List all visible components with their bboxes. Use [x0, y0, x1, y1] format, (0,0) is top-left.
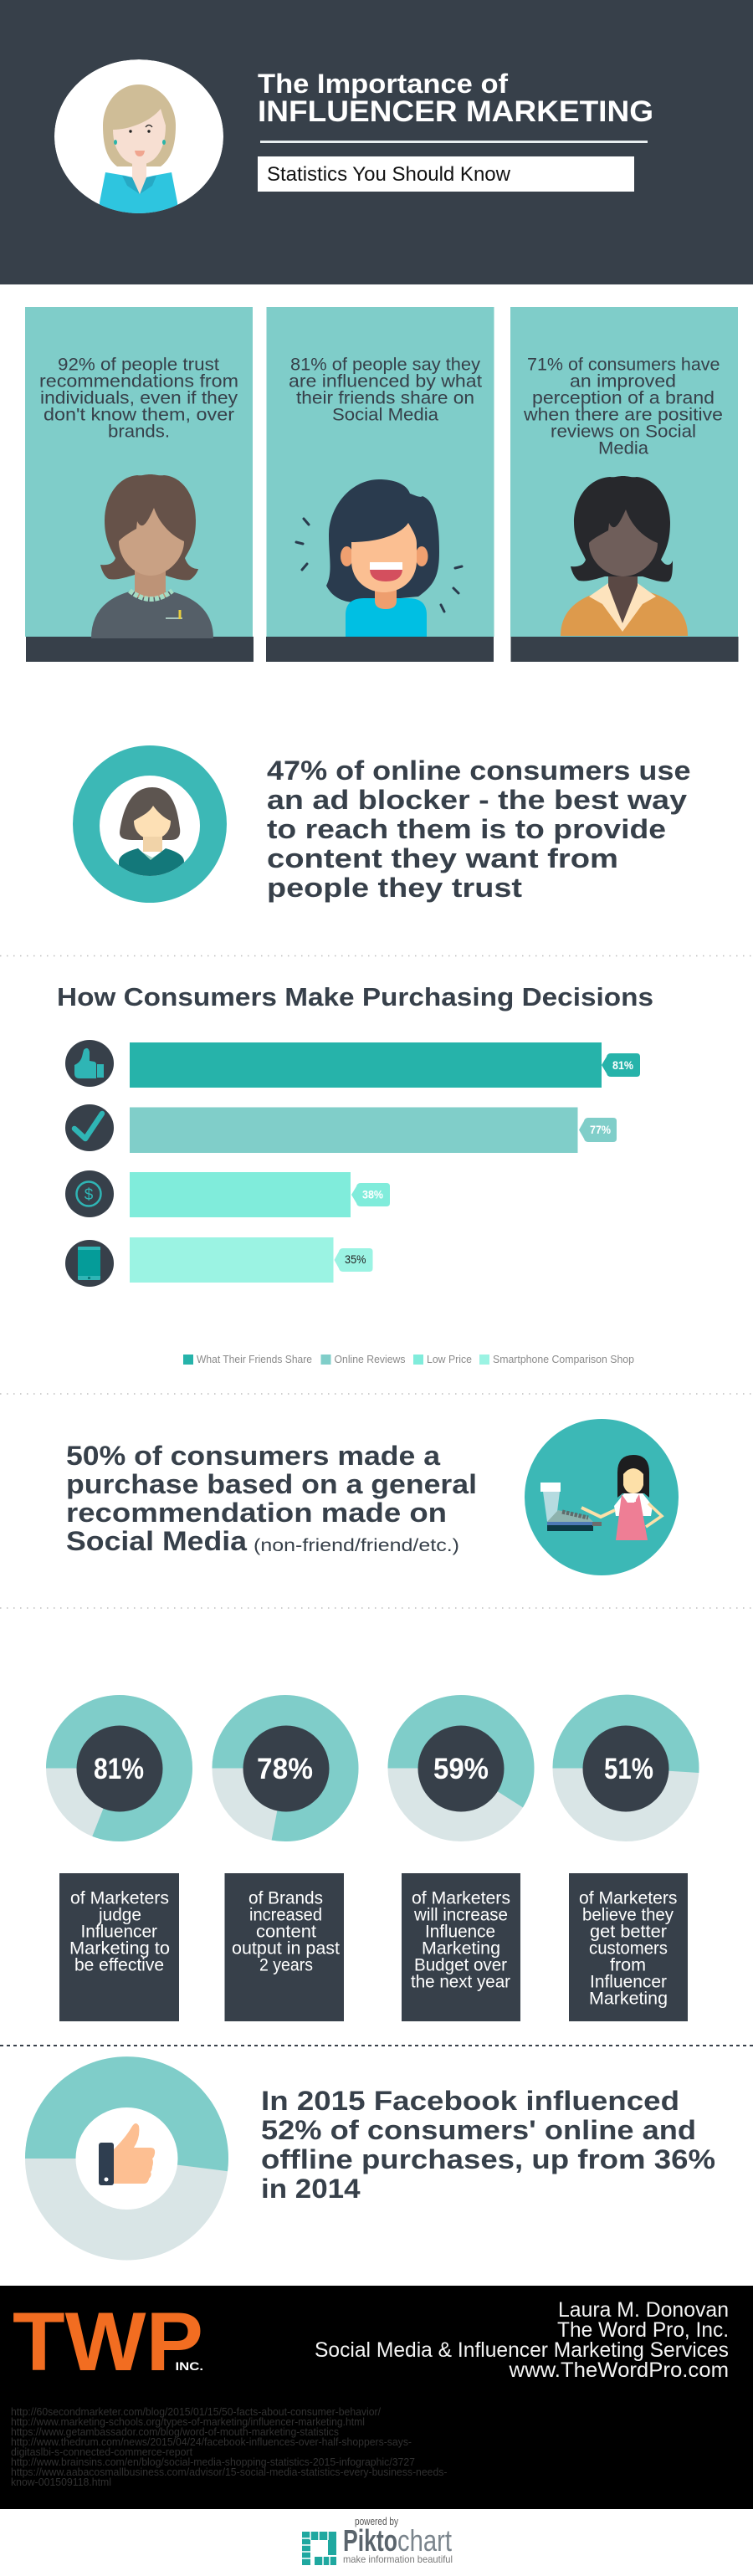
text box: marketers judge effective: of Marketers: [70, 1889, 169, 1908]
card text: [39, 355, 238, 442]
chart legend: Online Reviews: [335, 1354, 405, 1365]
title: INFLUENCER MARKETING: [258, 95, 653, 128]
card text: reviews on Social: [551, 422, 696, 442]
card text: 81% of people say they: [290, 355, 481, 375]
stat text: content they want from: [267, 843, 618, 873]
powered by Piktochart logo: chart: [397, 2523, 452, 2558]
card text: recommendations from: [39, 371, 238, 392]
chart legend: [183, 1354, 634, 1365]
panel: 92% trust recommendations: [25, 307, 254, 662]
sources list: digitaslbi-s-connected-commerce-report: [11, 2446, 193, 2458]
text box: brands increased content: output in past: [232, 1939, 340, 1958]
card text: their friends share on: [296, 388, 474, 408]
card text: Media: [598, 438, 648, 458]
card text: perception of a brand: [532, 388, 715, 408]
stat text: (non-friend/friend/etc.): [254, 1536, 459, 1555]
text box: brands increased content: 2 years: [259, 1956, 313, 1974]
donut: 59%: 59%: [433, 1753, 489, 1785]
bar: what their friends share 81%: [130, 1042, 640, 1088]
card text: brands.: [108, 422, 170, 442]
bar: what their friends share 81%: 81%: [612, 1058, 633, 1072]
card text: 92% of people trust: [58, 355, 219, 375]
chart legend: What Their Friends Share: [197, 1354, 312, 1365]
stat text: Social Media: [66, 1526, 247, 1556]
chart legend: Smartphone Comparison Shop: [493, 1354, 634, 1365]
powered by Piktochart logo: powered by: [355, 2515, 398, 2527]
contact details: The Word Pro, Inc.: [557, 2318, 729, 2342]
icon: blonde woman avatar: [54, 59, 223, 218]
text box: brands increased content: content: [256, 1923, 316, 1941]
bar: online reviews 77%: 77%: [590, 1123, 611, 1136]
stat text: to reach them is to provide: [267, 814, 666, 844]
donut: 51%: 51%: [604, 1753, 653, 1785]
text box: marketers increase budget: the next year: [411, 1973, 510, 1991]
card text: are influenced by what: [289, 371, 482, 392]
text box: marketers better customers: Marketing: [589, 1990, 668, 2008]
stat text: offline purchases, up from 36%: [261, 2144, 715, 2174]
stat text: in 2014: [261, 2174, 361, 2204]
powered by Piktochart logo: [302, 2515, 453, 2565]
icon: check mark: [65, 1104, 114, 1151]
card text: Social Media: [332, 405, 438, 425]
ad blocker stat section: [73, 745, 691, 903]
donut: 78%: 78%: [257, 1753, 313, 1785]
chart heading: How Consumers Make Purchasing Decisions: [57, 982, 653, 1011]
title: The Importance of: [258, 69, 508, 99]
sources list: https://www.getambassador.com/blog/word-of-mouth-marketing-statistics: [11, 2426, 339, 2438]
icon: cashier at register: [525, 1419, 679, 1575]
sources list: http://www.brainsins.com/en/blog/social-media-shopping-statistics-2015-infographic/3727: [11, 2456, 415, 2468]
stat text: [267, 755, 691, 903]
donut: 59%: [388, 1695, 534, 1841]
icon: smartphone: [65, 1240, 114, 1287]
icon: smiling woman: [296, 479, 462, 637]
sources list: http://www.marketing-schools.org/types-of-marketing/influencer-marketing.html: [11, 2416, 365, 2428]
bar: low price 38%: [130, 1172, 390, 1217]
text box: brands increased content: [224, 1873, 344, 2021]
stat text: 50% of consumers made a: [66, 1441, 440, 1471]
chart legend: Low Price: [427, 1354, 472, 1365]
stat text: 47% of online consumers use: [267, 755, 691, 786]
contact details: [315, 2298, 729, 2382]
TWP logo: INC.: [176, 2359, 203, 2373]
social media purchase stat section: [66, 1419, 679, 1575]
icon: woman with black hair: [561, 476, 688, 636]
stat text: recommendation made on: [66, 1498, 447, 1528]
sources list: know-001509118.html: [11, 2476, 111, 2488]
stat text: 52% of consumers' online and: [261, 2115, 696, 2145]
text box: marketers increase budget: Budget over: [414, 1956, 507, 1974]
sources list: http://60secondmarketer.com/blog/2015/01/15/50-facts-about-consumer-behavior/: [11, 2406, 382, 2418]
icon: woman in teal ring: [73, 745, 227, 903]
donut: 51%: [552, 1695, 699, 1841]
sources list: http://www.thedrum.com/news/2015/04/24/facebook-influences-over-half-shoppers-says-: [11, 2436, 412, 2448]
ticks around the head: [296, 519, 462, 612]
text box: marketers increase budget: [402, 1873, 520, 2021]
text box: marketers better customers: of Marketers: [579, 1889, 678, 1908]
donut: 81%: [46, 1695, 192, 1841]
sources list: https://www.aabacosmallbusiness.com/advisor/15-social-media-statistics-every-business-needs-: [11, 2466, 447, 2478]
footer panel: [0, 2286, 753, 2509]
subtitle box: Statistics You Should Know: [267, 163, 511, 186]
facebook stat section: [25, 2056, 715, 2261]
icon: dollar coin: $: [85, 1186, 94, 1204]
section: how consumers make purchasing decisions: [57, 982, 653, 1365]
card text: an improved: [570, 371, 676, 392]
stat text: [66, 1441, 477, 1556]
powered by Piktochart logo: make information beautiful: [343, 2553, 453, 2565]
stat text: people they trust: [267, 873, 522, 903]
text box: marketers better customers: [569, 1873, 688, 2021]
stat text: [261, 2086, 715, 2204]
donut: 52% with thumbs up: [25, 2056, 228, 2261]
bar: smartphone comparison shop 35%: [130, 1237, 373, 1283]
bar: smartphone comparison shop 35%: 35%: [345, 1252, 366, 1266]
text box: marketers increase budget: Marketing: [422, 1939, 500, 1958]
bar: low price 38%: 38%: [362, 1188, 383, 1201]
donut: 81%: 81%: [94, 1753, 144, 1785]
text box: marketers better customers: believe they: [582, 1906, 674, 1924]
panel: 71% improved perception: [510, 307, 738, 662]
stat text: purchase based on a general: [66, 1469, 477, 1499]
card text: individuals, even if they: [40, 388, 238, 408]
card text: [523, 355, 723, 458]
icon: woman with brown hair: [91, 474, 213, 638]
text box: brands increased content: increased: [249, 1906, 322, 1924]
icon: thumbs up: [65, 1040, 114, 1087]
text box: marketers better customers: customers: [589, 1939, 668, 1958]
panel: 81% influenced by friends: [266, 307, 494, 662]
stat text: an ad blocker - the best way: [267, 785, 687, 815]
subtitle box: [258, 156, 634, 192]
text box: marketers judge effective: Influencer: [80, 1923, 157, 1941]
text box: marketers increase budget: Influence: [425, 1923, 495, 1941]
text box: marketers judge effective: Marketing to: [69, 1939, 170, 1958]
text box: marketers increase budget: will increase: [413, 1906, 508, 1924]
icon: dollar coin: [65, 1170, 114, 1217]
icon: Piktochart mark: [302, 2532, 336, 2565]
text box: marketers increase budget: of Marketers: [412, 1889, 510, 1908]
text box: marketers judge effective: be effective: [74, 1956, 164, 1974]
TWP logo: TWP: [13, 2295, 203, 2388]
card text: when there are positive: [523, 405, 723, 425]
text box: marketers judge effective: judge: [98, 1906, 141, 1924]
contact details: Laura M. Donovan: [558, 2298, 729, 2322]
icon: hand thumbs up: [99, 2123, 155, 2185]
text box: marketers better customers: get better: [590, 1923, 667, 1941]
card text: [289, 355, 482, 425]
header banner: [0, 0, 753, 284]
text box: marketers better customers: Influencer: [590, 1973, 667, 1991]
title: [258, 69, 653, 128]
card text: don't know them, over: [44, 405, 234, 425]
contact details: www.TheWordPro.com: [508, 2358, 729, 2382]
card text: 71% of consumers have: [527, 355, 720, 375]
stat text: In 2015 Facebook influenced: [261, 2086, 679, 2116]
text box: marketers better customers: from: [610, 1956, 646, 1974]
contact details: Social Media & Influencer Marketing Services: [315, 2338, 729, 2362]
bar: online reviews 77%: [130, 1108, 617, 1153]
text box: marketers judge effective: [59, 1873, 179, 2021]
sources list: [11, 2406, 447, 2488]
donut: 78%: [213, 1695, 358, 1841]
text box: brands increased content: of Brands: [248, 1889, 323, 1908]
powered by Piktochart logo: Pikto: [343, 2523, 397, 2558]
